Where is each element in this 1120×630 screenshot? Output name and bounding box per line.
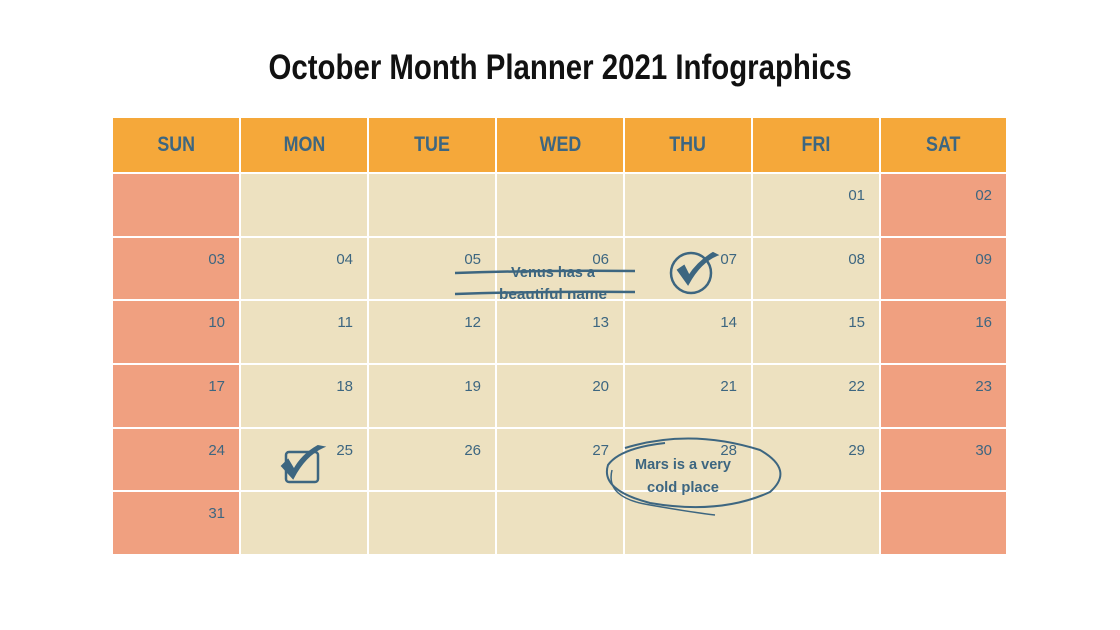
day grid bbox=[113, 174, 1006, 554]
header row bbox=[113, 118, 1006, 172]
note: Venus struck through: Venus has a bbox=[511, 264, 596, 281]
day grid: 10 bbox=[208, 314, 225, 331]
day grid: 05 bbox=[464, 251, 481, 268]
day grid: 06 bbox=[592, 251, 609, 268]
day grid: 03 bbox=[208, 251, 225, 268]
note: Venus struck through bbox=[455, 264, 635, 303]
day grid: 29 bbox=[848, 442, 865, 459]
title: October Month Planner 2021 Infographics bbox=[268, 48, 852, 87]
day grid: 15 bbox=[848, 314, 865, 331]
day grid: 07 bbox=[720, 251, 737, 268]
day grid: 16 bbox=[975, 314, 992, 331]
note: Venus struck through: beautiful name bbox=[499, 286, 607, 303]
header row: FRI bbox=[802, 133, 830, 156]
icon: circled check bbox=[671, 253, 717, 293]
day grid: 21 bbox=[720, 378, 737, 395]
day grid: 19 bbox=[464, 378, 481, 395]
day grid: 24 bbox=[208, 442, 225, 459]
day grid: 22 bbox=[848, 378, 865, 395]
day grid: 01 bbox=[848, 187, 865, 204]
day grid: 08 bbox=[848, 251, 865, 268]
header row: THU bbox=[670, 133, 706, 156]
day grid: 31 bbox=[208, 505, 225, 522]
day grid: 27 bbox=[592, 442, 609, 459]
header row: SAT bbox=[926, 133, 961, 156]
day grid: 25 bbox=[336, 442, 353, 459]
day grid: 26 bbox=[464, 442, 481, 459]
header row: SUN bbox=[157, 133, 195, 156]
callout: Mars circled bbox=[607, 438, 780, 515]
day grid: 14 bbox=[720, 314, 737, 331]
day grid: 18 bbox=[336, 378, 353, 395]
day grid: 09 bbox=[975, 251, 992, 268]
day grid: 23 bbox=[975, 378, 992, 395]
header row: TUE bbox=[414, 133, 450, 156]
header row: WED bbox=[539, 133, 581, 156]
day grid: 20 bbox=[592, 378, 609, 395]
callout: Mars circled: Mars is a very bbox=[635, 456, 732, 473]
header row: MON bbox=[283, 133, 325, 156]
day grid: 12 bbox=[464, 314, 481, 331]
day grid: 17 bbox=[208, 378, 225, 395]
icon: boxed check bbox=[282, 446, 323, 482]
callout: Mars circled: cold place bbox=[647, 479, 719, 496]
day grid: 30 bbox=[975, 442, 992, 459]
day grid: 28 bbox=[720, 442, 737, 459]
day grid: 02 bbox=[975, 187, 992, 204]
day grid: 13 bbox=[592, 314, 609, 331]
day grid: 04 bbox=[336, 251, 353, 268]
day grid: 11 bbox=[337, 314, 353, 331]
